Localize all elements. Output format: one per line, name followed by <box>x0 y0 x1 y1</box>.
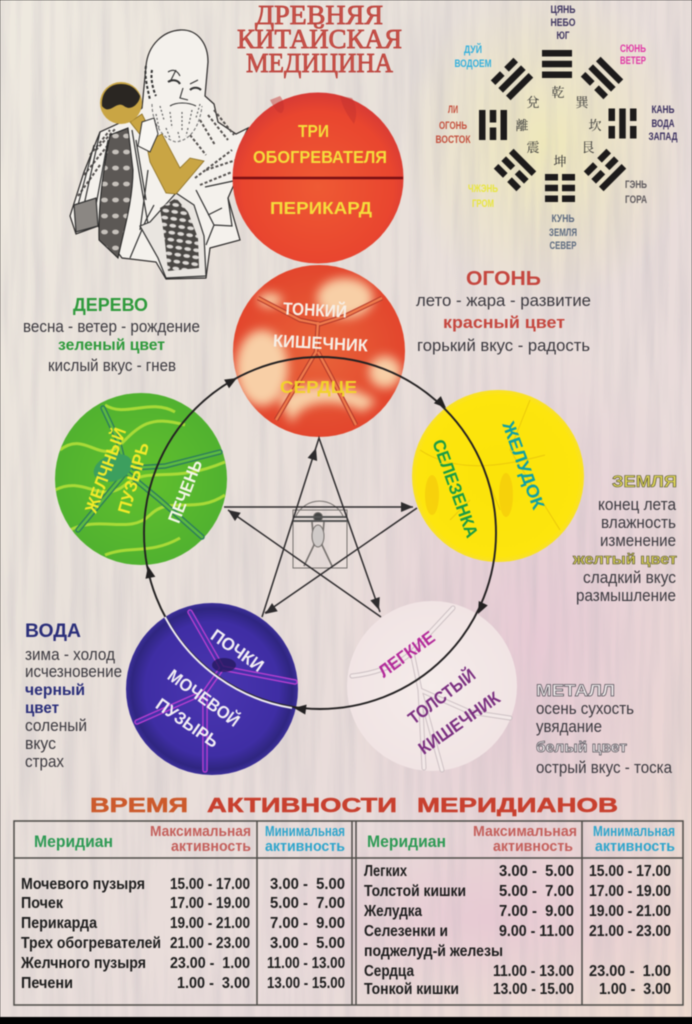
table left rows: Почек <box>21 895 64 912</box>
text block: wood: ДЕРЕВО <box>73 295 148 315</box>
sage: robe stripe <box>99 128 133 258</box>
label: fire: ОГОНЬ <box>439 120 467 132</box>
label: wind: СЮНЬ <box>620 43 646 55</box>
text block: metal <box>536 681 673 777</box>
table left rows: Перикарда <box>21 915 97 932</box>
label: water: ВОДА <box>652 118 675 130</box>
table header: Меридиан <box>367 832 446 851</box>
table left rows: 11.00 - 13.00 <box>267 955 345 972</box>
label: fire <box>436 104 471 146</box>
text block: earth: сладкий вкус <box>583 569 676 587</box>
text block: earth: конец лета <box>598 496 677 514</box>
table right rows: 21.00 - 23.00 <box>589 923 671 940</box>
trigram: mountain <box>584 149 626 191</box>
table right rows: Тонкой кишки <box>364 981 459 998</box>
bagua diagram <box>436 4 678 252</box>
label: heaven <box>550 4 576 42</box>
title: ДРЕВНЯЯ <box>255 0 383 30</box>
text block: water: черный <box>25 682 85 699</box>
sage: upper robe shading <box>78 110 236 196</box>
label: earth <box>549 213 577 252</box>
table left rows: 13.00 - 15.00 <box>267 975 345 992</box>
bagua characters: 坤 <box>553 151 567 170</box>
label: earth: ЗЕМЛЯ <box>549 227 577 239</box>
trigram: thunder <box>494 149 536 191</box>
label: pericardium: ПЕРИКАРД <box>270 198 373 218</box>
table right rows: 5.00 - 7.00 <box>499 883 574 900</box>
text block: fire: красный цвет <box>443 313 565 332</box>
text block: water: страх <box>25 753 65 771</box>
title: КИТАЙСКАЯ <box>237 24 402 54</box>
text block: wood: весна - ветер - рождение <box>23 318 200 336</box>
text block: metal: МЕТАЛЛ <box>536 681 615 700</box>
trigram: lake <box>491 58 533 100</box>
circle: fire <box>233 265 405 437</box>
table right rows: 9.00 - 11.00 <box>499 923 574 940</box>
text block: water: соленый <box>25 717 87 735</box>
table left rows: 7.00 - 9.00 <box>270 915 345 932</box>
table left rows: 5.00 - 7.00 <box>270 895 345 912</box>
table left rows: 23.00 - 1.00 <box>170 955 250 972</box>
table right rows: 7.00 - 9.00 <box>499 903 574 920</box>
text block: earth: изменение <box>600 532 676 550</box>
text block: water: зима - холод <box>25 646 115 664</box>
label: bladder: МОЧЕВОЙ <box>164 664 244 731</box>
label: heaven: ЮГ <box>556 30 570 42</box>
table header: Максимальная <box>150 824 251 840</box>
table heading: ВРЕМЯ <box>90 795 188 817</box>
label: wind <box>620 43 646 67</box>
illustration: sage holding golden key <box>70 30 248 279</box>
label: mountain: ГЭНЬ <box>625 179 647 191</box>
sage: yin-yang orb <box>100 82 142 124</box>
table header: Минимальная <box>593 824 675 840</box>
trigram: fire <box>479 110 507 140</box>
text block: metal: белый цвет <box>536 739 627 756</box>
table right rows: Легких <box>364 863 407 880</box>
text block: earth: влажность <box>601 514 676 532</box>
table right rows: 17.00 - 19.00 <box>589 883 671 900</box>
text block: metal: осень сухость <box>536 700 634 718</box>
table left rows: Мочевого пузыря <box>21 876 145 893</box>
label: fire: ВОСТОК <box>436 134 471 146</box>
label: gallbladder: ЖЕЛЧНЫЙ <box>80 425 130 516</box>
label: lake: ВОДОЕМ <box>454 58 492 70</box>
trigram: wind <box>581 57 623 99</box>
label: thunder: ГРОМ <box>472 198 494 210</box>
table left rows: Печени <box>21 975 73 992</box>
bagua characters: 艮 <box>581 137 595 156</box>
label: wind: ВЕТЕР <box>620 55 646 67</box>
label: large intestine: ТОЛСТЫЙ <box>404 664 479 728</box>
table left rows: 3.00 - 5.00 <box>270 935 345 952</box>
label: gallbladder second word: ПУЗЫРЬ <box>114 440 153 516</box>
label: thunder <box>468 183 498 210</box>
table right rows: 3.00 - 5.00 <box>499 863 574 880</box>
title: МЕДИЦИНА <box>246 48 393 78</box>
sage: face and beard <box>145 66 202 142</box>
text block: fire: лето - жара - развитие <box>416 292 591 310</box>
text block: fire: ОГОНЬ <box>466 268 541 290</box>
central figure in square <box>293 501 347 568</box>
title <box>237 0 402 78</box>
label: water: КАНЬ <box>652 104 675 116</box>
text block: wood: зеленый цвет <box>58 337 165 354</box>
table right rows <box>363 863 671 998</box>
bagua characters: 乾 <box>551 82 565 101</box>
label: stomach: ЖЕЛУДОК <box>498 418 549 512</box>
label: heart: СЕРДЦЕ <box>280 377 357 397</box>
label: water <box>648 104 678 143</box>
table left rows: 21.00 - 23.00 <box>170 935 250 952</box>
text block: earth <box>572 472 677 605</box>
label: lake <box>454 43 492 70</box>
table header: активность <box>265 839 345 855</box>
table header: Минимальная <box>265 824 345 840</box>
label: small intestine second word: КИШЕЧНИК <box>272 331 369 356</box>
table header: Меридиан <box>34 832 113 851</box>
bagua characters <box>515 82 602 170</box>
label: heaven: НЕБО <box>550 17 576 29</box>
table header <box>34 824 675 855</box>
table right rows: 23.00 - 1.00 <box>589 963 671 980</box>
table header: активность <box>171 839 251 855</box>
text block: fire: горький вкус - радость <box>417 337 590 355</box>
label: water: ЗАПАД <box>648 131 678 143</box>
label: large intestine second word: КИШЕЧНИК <box>414 687 504 758</box>
text block: earth: ЗЕМЛЯ <box>612 472 677 491</box>
circle: water <box>126 603 298 775</box>
bagua characters: 坎 <box>588 115 602 134</box>
table left rows: 3.00 - 5.00 <box>270 876 345 893</box>
circle: metal <box>347 601 517 771</box>
table left rows: 15.00 - 17.00 <box>170 876 250 893</box>
table right rows: Сердца <box>364 963 414 980</box>
sage: golden key <box>130 114 204 194</box>
label: small intestine: ТОНКИЙ <box>283 297 348 322</box>
table right rows: поджелуд-й железы <box>364 943 503 960</box>
sage: hand <box>138 118 158 152</box>
label: spleen: СЕЛЕЗЕНКА <box>428 437 482 541</box>
text block: wood: кислый вкус - гнев <box>48 357 176 375</box>
table right rows: 13.00 - 15.00 <box>493 981 574 998</box>
table right rows: 1.00 - 3.00 <box>599 981 671 998</box>
bagua characters: 兌 <box>526 92 540 111</box>
text block: metal: острый вкус - тоска <box>536 759 673 777</box>
label: earth: КУНЬ <box>552 213 575 225</box>
text block: water: ВОДА <box>25 621 81 642</box>
label: lake: ДУЙ <box>464 43 482 56</box>
table left rows: Трех обогревателей <box>21 935 161 952</box>
table right rows: Желудка <box>363 903 422 920</box>
label: mountain <box>625 179 647 206</box>
label: thunder: ЧЖЭНЬ <box>468 183 498 195</box>
circle: wood <box>55 393 227 565</box>
sage: sleeve folds <box>74 130 238 258</box>
table left rows: 17.00 - 19.00 <box>170 895 250 912</box>
circle: triple heater and pericardium <box>232 92 404 264</box>
sage: net panel <box>160 198 199 271</box>
table left rows: Желчного пузыря <box>20 955 146 972</box>
arrows: generating cycle ring <box>143 357 496 715</box>
label: liver: ПЕЧЕНЬ <box>164 457 206 526</box>
table right rows: Толстой кишки <box>364 883 466 900</box>
table header: активность <box>595 839 675 855</box>
table header: активность <box>493 839 573 855</box>
label: three heaters: ТРИ <box>298 121 329 141</box>
text block: metal: увядание <box>536 718 602 736</box>
label: bladder second word: ПУЗЫРЬ <box>152 694 223 752</box>
label: kidneys: ПОЧКИ <box>207 625 268 676</box>
meridian activity table <box>14 821 683 1005</box>
text block: fire <box>416 268 591 355</box>
text block: water: цвет <box>25 700 59 717</box>
arrows: pentagram control cycle <box>224 438 417 618</box>
table left rows <box>20 876 345 992</box>
label: mountain: ГОРА <box>625 194 647 206</box>
table heading: АКТИВНОСТИ <box>207 795 397 817</box>
table heading <box>90 795 618 817</box>
bagua characters: 巽 <box>575 92 589 111</box>
table right rows: 15.00 - 17.00 <box>589 863 671 880</box>
table left rows: 1.00 - 3.00 <box>177 975 250 992</box>
text block: water: исчезновение <box>25 663 122 681</box>
label: heaters word: ОБОГРЕВАТЕЛЯ <box>253 147 387 167</box>
table right rows: 11.00 - 13.00 <box>493 963 574 980</box>
text block: earth: размышление <box>576 587 676 605</box>
text block: earth: желтый цвет <box>572 551 677 568</box>
table left rows: 19.00 - 21.00 <box>170 915 250 932</box>
circle: earth <box>412 390 584 562</box>
table right rows: 19.00 - 21.00 <box>589 903 671 920</box>
sage: net apron <box>140 193 206 278</box>
trigram: earth <box>545 174 575 202</box>
label: lungs: ЛЕГКИЕ <box>374 627 439 681</box>
label: earth: СЕВЕР <box>550 240 576 252</box>
table header: Максимальная <box>473 824 577 840</box>
text block: wood <box>23 295 200 375</box>
trigram: heaven <box>542 50 572 78</box>
table right rows: Селезенки и <box>364 923 448 940</box>
bagua characters: 震 <box>526 137 540 156</box>
label: heaven: ЦЯНЬ <box>550 4 576 16</box>
table heading: МЕРИДИАНОВ <box>417 795 618 817</box>
text block: water: вкус <box>25 735 56 753</box>
trigram: water <box>608 108 636 138</box>
text block: water <box>25 621 122 771</box>
label: fire: ЛИ <box>448 104 458 116</box>
bagua characters: 離 <box>515 115 529 134</box>
